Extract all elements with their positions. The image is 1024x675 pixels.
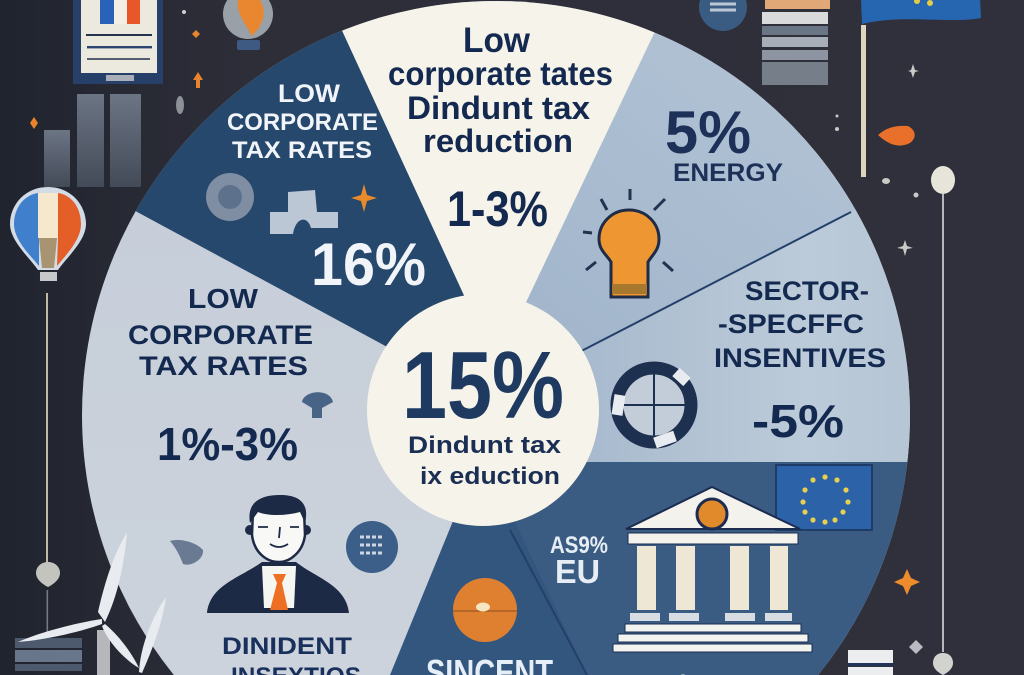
decoration: right sparkles — [835, 64, 919, 256]
icon: orange star right — [894, 569, 920, 595]
icon: puzzle shape — [270, 190, 338, 234]
panel: low corporate tax rates 16% — [136, 30, 464, 346]
text block: center caption: ix eduction — [420, 463, 560, 490]
number: 16%: 16% — [311, 231, 426, 298]
icon: orange light bulb — [583, 189, 673, 297]
icon: businessman — [207, 495, 349, 613]
text block: AS9% EU: EU — [555, 553, 600, 590]
icon: top badge — [699, 0, 747, 31]
number: 1-3%: 1-3% — [447, 181, 548, 237]
text block: AS9% EU — [550, 532, 608, 590]
text block: dinident insextios — [222, 633, 361, 675]
center circle — [367, 294, 599, 526]
panel: sector-specific incentives — [583, 210, 910, 462]
text block: top white slice — [388, 21, 613, 237]
text block: top white slice: reduction — [423, 123, 573, 159]
icon: coin — [206, 173, 254, 221]
decoration: left bar chart — [44, 94, 141, 187]
icon: small mushroom — [302, 392, 333, 418]
text block: energy — [665, 99, 783, 187]
text block: low corporate tax rates left: CORPORATE — [128, 320, 313, 350]
text block: sector-specific incentives: INSENTIVES — [714, 343, 886, 373]
decoration: bottom left striped panel — [15, 638, 82, 671]
text block: low corporate tax rates left: TAX RATES — [139, 351, 308, 381]
text block: energy: 5% — [665, 99, 751, 166]
text block: top white slice: Low — [463, 21, 531, 60]
text block: sector-specific incentives: -SPECFFC — [718, 309, 864, 339]
heading text: dark slice: LOW — [278, 80, 340, 108]
decoration: right pole with pins — [931, 166, 955, 675]
icon: French flag balloon — [10, 187, 86, 281]
heading text: dark slice — [227, 80, 426, 298]
text block: low corporate tax rates left — [128, 283, 313, 470]
number: -5%: -5% — [752, 395, 844, 447]
decoration: book stack — [762, 0, 830, 85]
icon: orange star in dark slice — [351, 184, 377, 212]
text block: low corporate tax rates left: LOW — [188, 283, 259, 314]
text block: center caption: Dindunt tax — [408, 432, 562, 459]
text block: top white slice: Dindunt tax — [407, 90, 590, 126]
text block: AS9% EU: AS9% — [550, 532, 608, 559]
icon: ring target — [617, 368, 691, 443]
icon: top EU flag on pole — [861, 0, 981, 177]
panel: dividend tax reduction — [342, 1, 654, 302]
icon: wind turbines — [18, 533, 166, 675]
decoration: bottom right striped flag — [848, 650, 893, 675]
icon: bank building — [613, 487, 812, 652]
text block: sector-specific incentives — [714, 276, 886, 447]
icon: top light bulb — [223, 0, 273, 50]
icon: orange circle — [453, 578, 517, 642]
panel: EU — [514, 462, 908, 675]
heading text: dark slice: CORPORATE — [227, 109, 378, 136]
icon: round document badge — [346, 521, 398, 573]
decoration: left pole with pin — [36, 293, 60, 640]
number: 1%-3%: 1%-3% — [157, 418, 298, 470]
decoration: left sparkles — [30, 10, 203, 129]
icon: small cloud — [170, 540, 203, 565]
decoration: left document with French flag — [73, 0, 163, 84]
icon: orange leaf — [878, 126, 915, 146]
number: 15%: 15% — [402, 332, 564, 439]
heading text: dark slice: TAX RATES — [232, 137, 372, 164]
text block: center caption — [408, 432, 562, 490]
text block: top white slice: corporate tates — [388, 55, 613, 92]
text block: dinident insextios: DINIDENT — [222, 633, 352, 660]
panel: energy — [526, 32, 856, 350]
text block: energy: ENERGY — [673, 159, 783, 187]
icon: EU flag — [776, 465, 872, 530]
panel: sincent — [390, 522, 586, 675]
text block: sector-specific incentives: SECTOR- — [745, 276, 869, 306]
decoration: small diamond — [909, 640, 923, 654]
slice divider lines — [510, 212, 851, 675]
